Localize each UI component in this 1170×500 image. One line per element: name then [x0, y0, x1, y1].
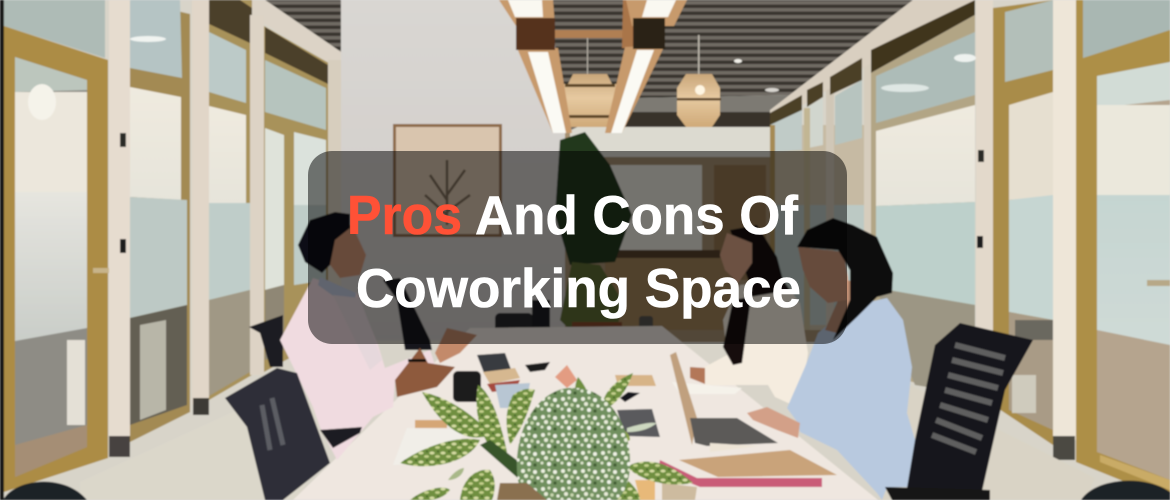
title overlay panel [308, 151, 847, 344]
left wall: column three [250, 15, 264, 375]
pendant lamp right [677, 35, 721, 127]
left wall: column two [192, 0, 209, 415]
left wall: panel four [264, 26, 341, 372]
left wall: door one [0, 0, 109, 500]
items on table [393, 352, 837, 500]
right wall: column seven [1053, 0, 1076, 460]
heading line one: Pros [347, 184, 462, 246]
left wall: column one [109, 0, 131, 457]
ceiling light fixture right [605, 0, 687, 133]
right wall: column six [976, 0, 993, 330]
right wall: door seven [993, 0, 1053, 445]
pendant lamp behind fixtures [563, 38, 618, 127]
ceiling light fixture left [499, 0, 572, 133]
left wall: panel two [130, 0, 190, 442]
floor [80, 375, 1095, 500]
plant behind table [555, 132, 632, 360]
foreground chair tops [3, 481, 1170, 500]
right wall: door eight [1076, 0, 1170, 500]
foreground potted plant [400, 365, 693, 500]
heading line one: And Cons Of [475, 184, 799, 246]
man in pink blazer [280, 212, 477, 460]
conference table [293, 326, 878, 500]
right wall: panel six [871, 15, 976, 400]
framed botanical print [393, 124, 502, 237]
back wall [341, 0, 566, 340]
back chairs and gear [249, 278, 653, 367]
ceiling slats [225, 0, 975, 133]
left wall: panel three [209, 0, 252, 400]
woman in blue shirt [747, 218, 928, 500]
back room [565, 50, 875, 380]
heading line two: Coworking Space [356, 257, 801, 319]
woman in white blazer [672, 225, 808, 407]
front left office chair [225, 368, 362, 500]
heading line one [347, 184, 799, 246]
right office chair [885, 323, 1033, 500]
ceiling light crossbeam [555, 0, 636, 48]
